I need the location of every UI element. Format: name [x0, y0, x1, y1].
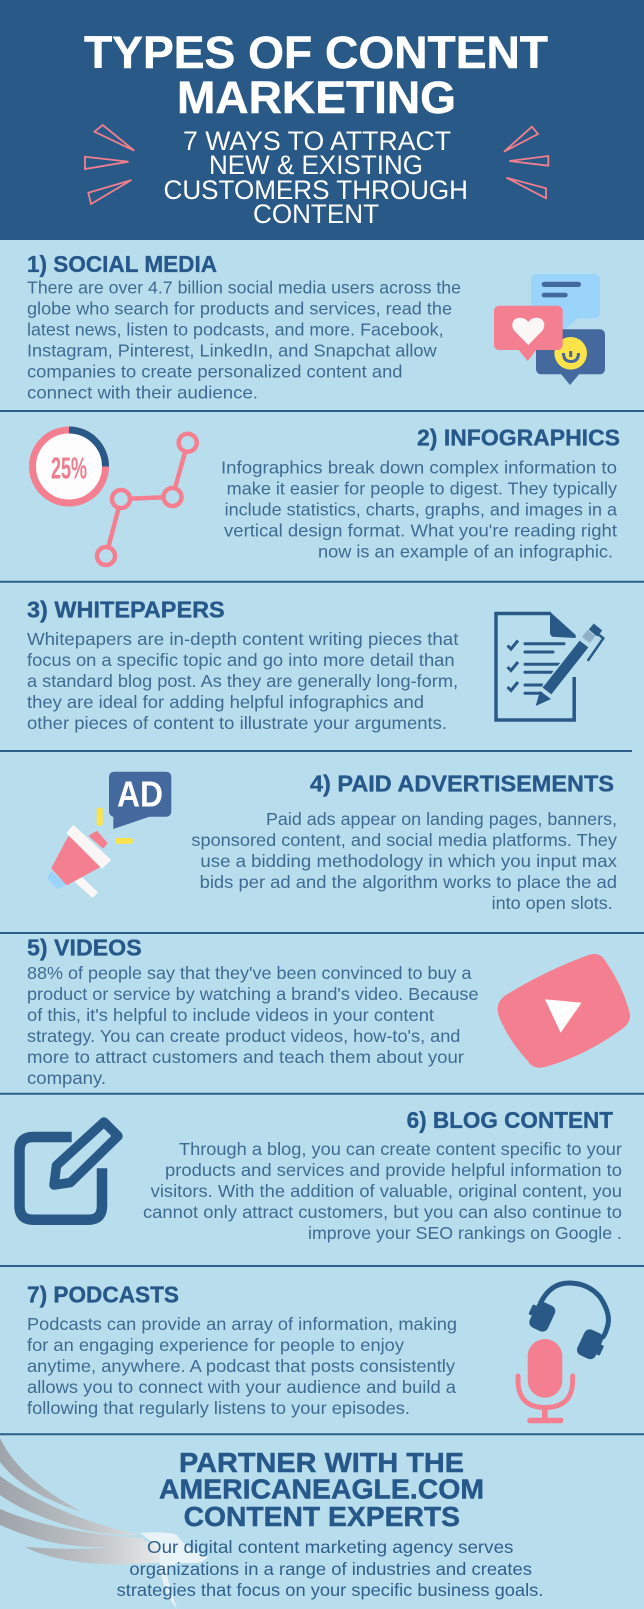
text: podcasts body: allows you to connect with your audience and build a [27, 1377, 456, 1397]
icon: microphone [518, 1339, 573, 1423]
text: blog content body: Through a blog, you can create content specific to your [179, 1139, 622, 1159]
heading: call to action: AMERICANEAGLE.COM [159, 1474, 484, 1505]
panel: social media [27, 251, 605, 402]
text: infographics body: now is an example of an infographic. [318, 541, 613, 561]
text: whitepapers body: a standard blog post. As they are generally long-form, [27, 671, 458, 691]
divider [0, 1265, 644, 1267]
text: videos body: of this, it's helpful to include videos in your content [27, 1005, 434, 1025]
text: videos body [27, 963, 478, 1088]
text: podcasts body [27, 1314, 457, 1418]
text: paid advertisements body: use a bidding methodology in which you input max [200, 851, 617, 871]
text: social media body [27, 278, 461, 402]
panel: call to action [0, 1438, 543, 1609]
text: social media body: connect with their audience. [27, 382, 258, 402]
subtitle: CONTENT [253, 199, 379, 229]
text: podcasts body: for an engaging experience for people to enjoy [27, 1335, 404, 1355]
text: podcasts body: following that regularly listens to your episodes. [27, 1398, 410, 1418]
text: whitepapers body: other pieces of content to illustrate your arguments. [27, 713, 447, 733]
text: paid advertisements body: into open slots. [492, 893, 613, 913]
heading: whitepapers: 3) WHITEPAPERS [27, 597, 225, 623]
text: whitepapers body: Whitepapers are in-depth content writing pieces that [27, 629, 459, 649]
text: social media body: Instagram, Pinterest, LinkedIn, and Snapchat allow [27, 340, 437, 360]
text: paid advertisements body: Paid ads appear on landing pages, banners, [266, 809, 617, 829]
icon: AD speech bubble [109, 772, 171, 829]
heading: call to action [159, 1447, 484, 1532]
text: blog content body [143, 1139, 622, 1243]
divider [0, 750, 632, 752]
text: social media body: latest news, listen to podcasts, and more. Facebook, [27, 320, 444, 340]
icon: AD speech bubble: AD [117, 774, 163, 815]
text: paid advertisements body: bids per ad and the algorithm works to place the ad [200, 872, 617, 892]
text: call to action body [117, 1537, 543, 1600]
icon: 25% donut chart: 25% [51, 450, 87, 486]
panel: whitepapers [27, 597, 603, 733]
panel: infographics [32, 425, 620, 565]
text: blog content body: improve your SEO rankings on Google . [308, 1223, 622, 1243]
subtitle: CUSTOMERS THROUGH [164, 175, 468, 205]
heading: paid advertisements: 4) PAID ADVERTISEMENTS [310, 771, 614, 797]
text: videos body: company. [27, 1068, 106, 1088]
text: infographics body: make it easier for people to digest. They typically [227, 478, 617, 498]
text: paid advertisements body: sponsored content, and social media platforms. They [191, 830, 617, 850]
icon: checklist document and pen [496, 612, 603, 720]
text: blog content body: visitors. With the addition of valuable, original content, you [151, 1181, 622, 1201]
heading: blog content: 6) BLOG CONTENT [407, 1107, 614, 1133]
panel: paid advertisements [49, 771, 617, 913]
panel: blog content [20, 1107, 622, 1243]
text: infographics body: vertical design format. What you're reading right [224, 520, 617, 540]
text: social media body: There are over 4.7 billion social media users across the [27, 278, 461, 298]
text: blog content body: cannot only attract customers, but you can also continue to [143, 1202, 622, 1222]
heading: infographics: 2) INFOGRAPHICS [417, 425, 620, 451]
icon: line graph [97, 434, 197, 565]
text: blog content body: products and services and provide helpful information to [165, 1160, 622, 1180]
panel: header [0, 0, 644, 240]
subtitle: NEW & EXISTING [209, 150, 423, 180]
icon: video play button [498, 954, 630, 1068]
icon: eagle wing [0, 1438, 208, 1609]
text: whitepapers body: they are ideal for adding helpful infographics and [27, 692, 424, 712]
subtitle [164, 126, 468, 229]
icon: megaphone [49, 808, 133, 896]
icon: left sparkle accents [85, 125, 134, 204]
text: call to action body: organizations in a range of industries and creates [129, 1559, 532, 1579]
heading: call to action: CONTENT EXPERTS [184, 1501, 460, 1532]
icon: right sparkle accents [504, 127, 548, 198]
text: paid advertisements body [191, 809, 617, 913]
title: MARKETING [177, 72, 456, 123]
text: videos body: product or service by watching a brand's video. Because [27, 984, 478, 1004]
heading: videos: 5) VIDEOS [27, 935, 142, 961]
heading: podcasts: 7) PODCASTS [27, 1282, 179, 1308]
text: podcasts body: anytime, anywhere. A podcast that posts consistently [27, 1356, 455, 1376]
panel: videos [27, 935, 630, 1088]
icon: 25% donut chart [32, 430, 106, 503]
subtitle: 7 WAYS TO ATTRACT [183, 126, 451, 156]
text: infographics body: Infographics break down complex information to [221, 457, 617, 477]
panel: podcasts [27, 1282, 608, 1423]
text: podcasts body: Podcasts can provide an array of information, making [27, 1314, 457, 1334]
divider [0, 932, 644, 934]
title: TYPES OF CONTENT [84, 27, 548, 78]
icon: headphones [527, 1283, 608, 1361]
icon: chat bubbles [494, 274, 605, 385]
text: call to action body: strategies that focus on your specific business goals. [117, 1580, 543, 1600]
text: social media body: companies to create personalized content and [27, 362, 402, 382]
text: videos body: more to attract customers and teach them about your [27, 1047, 464, 1067]
divider [0, 581, 644, 583]
icon: edit note [20, 1122, 118, 1220]
text: whitepapers body: focus on a specific topic and go into more detail than [27, 650, 455, 670]
heading: call to action: PARTNER WITH THE [179, 1447, 464, 1478]
title [84, 27, 548, 123]
text: infographics body: include statistics, charts, graphs, and images in a [225, 499, 617, 519]
text: videos body: strategy. You can create product videos, how-to's, and [27, 1026, 460, 1046]
text: videos body: 88% of people say that they've been convinced to buy a [27, 963, 472, 983]
text: call to action body: Our digital content marketing agency serves [147, 1537, 514, 1557]
divider [0, 410, 644, 412]
divider [0, 1433, 644, 1435]
heading: social media: 1) SOCIAL MEDIA [27, 251, 217, 277]
text: social media body: globe who search for products and services, read the [27, 298, 452, 318]
divider [0, 1093, 644, 1095]
text: whitepapers body [27, 629, 459, 733]
text: infographics body [221, 457, 617, 561]
